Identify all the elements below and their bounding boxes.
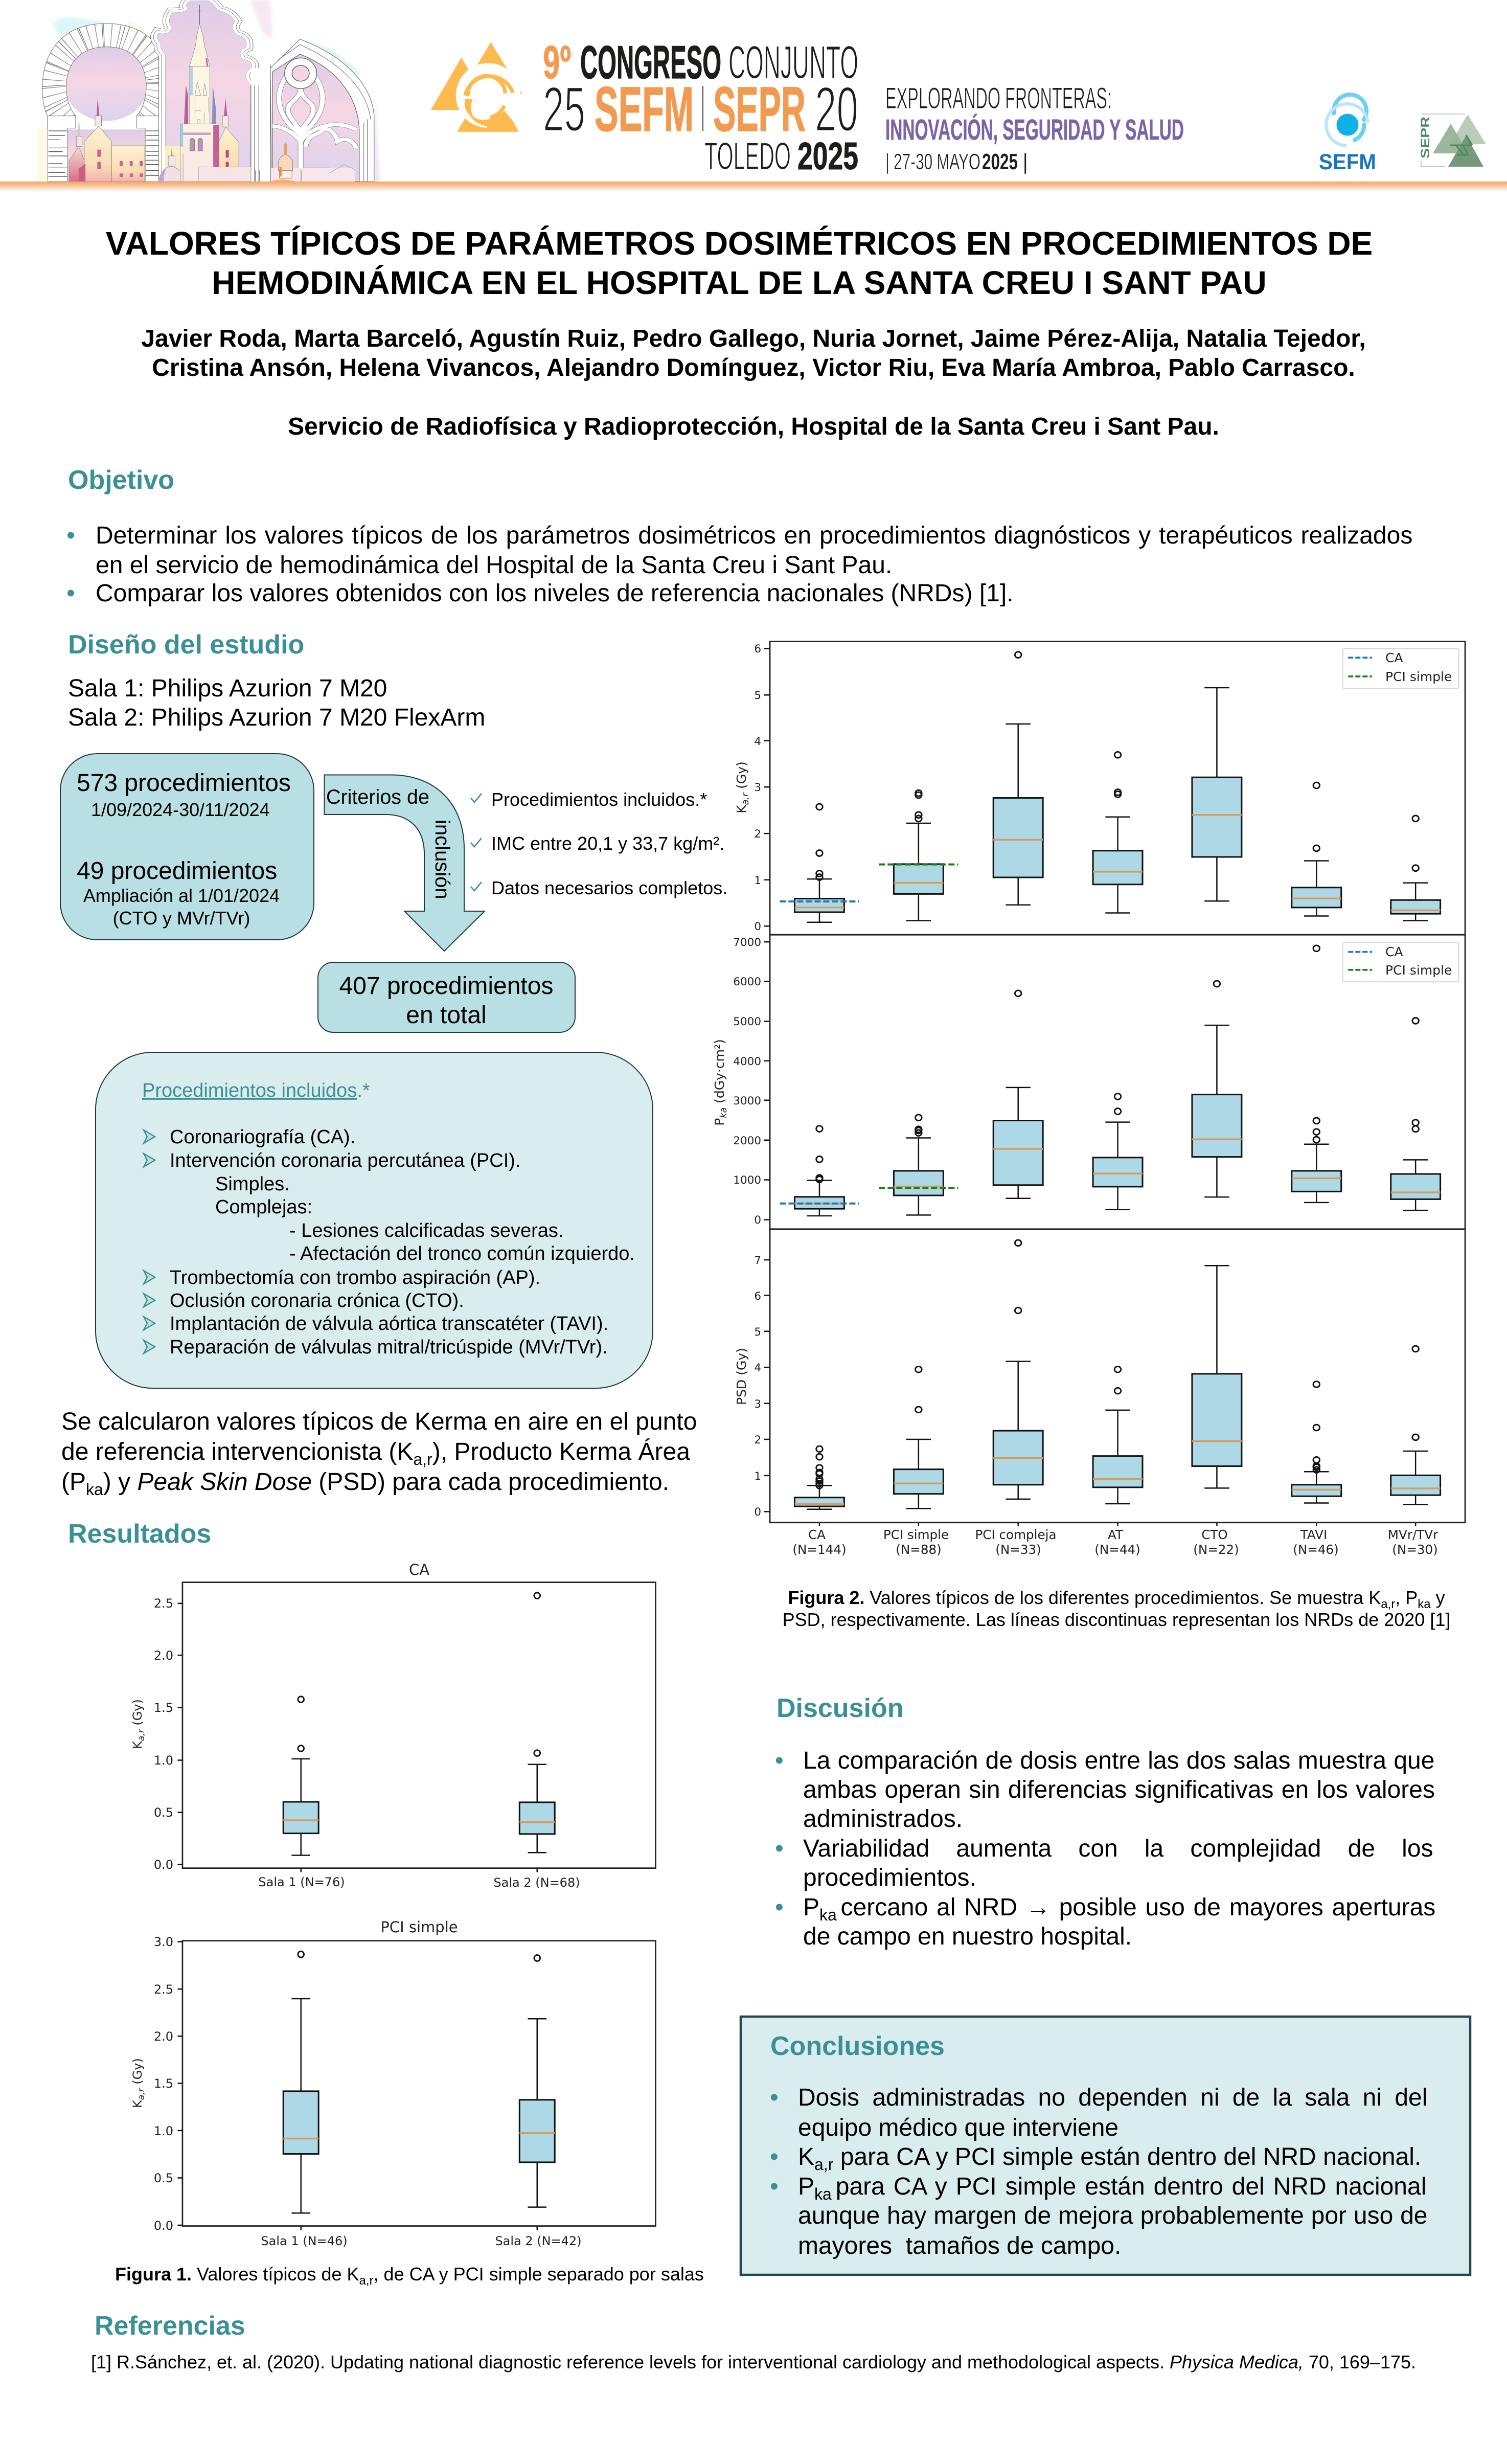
objectives list: • — [66, 580, 75, 607]
congress slogan: | 27-30 MAYO — [885, 149, 980, 174]
chart: PSD by procedure: PCI simple — [883, 1527, 949, 1542]
congress title wordmark: TOLEDO — [704, 134, 791, 177]
caption: figure 2: PSD, respectivamente. Las líneas discontinuas representan los NRDs de 2020 [1] — [783, 1609, 1450, 1630]
caption: figure 1: a,r — [359, 2274, 374, 2288]
chart: Pka by procedure: CA — [1385, 944, 1403, 959]
box: CA — [794, 804, 844, 922]
discussion list: P — [803, 1894, 819, 1921]
chart: Pka by procedure: 2000 — [733, 1135, 761, 1147]
methods paragraph: a,r — [413, 1450, 432, 1468]
heading: Diseño del estudio: Diseño del estudio — [68, 630, 304, 660]
chart: CA by room: 1.5 — [154, 1701, 173, 1715]
chart: Ka,r by procedure: 2 — [754, 828, 761, 841]
panel: included procedures: Reparación de válvulas mitral/tricúspide (MVr/TVr). — [170, 1337, 608, 1358]
authors: Javier Roda, Marta Barceló, Agustín Ruiz, Pedro Gallego, Nuria Jornet, Jaime Pérez-Alija, Natalia Tejedor, — [141, 325, 1366, 352]
congress title wordmark — [543, 37, 858, 177]
congress title wordmark: 25 — [543, 75, 585, 145]
chart: CA by room: 0.5 — [154, 1805, 173, 1820]
panel: initial procedures: 49 procedimientos — [77, 857, 277, 885]
caption: figure 2: Figura 2. Valores típicos de los diferentes procedimientos. Se muestra K — [788, 1587, 1381, 1608]
chart: Pka by procedure: 0 — [754, 1214, 761, 1227]
chart: PSD by procedure: TAVI — [1300, 1527, 1327, 1542]
header illustration: Toledo arches and skyline — [37, 0, 380, 182]
logo: SEFM — [1319, 95, 1376, 174]
authors: Cristina Ansón, Helena Vivancos, Alejandro Domínguez, Victor Riu, Eva María Ambroa, Pablo Carrasco. — [152, 354, 1355, 381]
congress slogan: 2025 — [982, 149, 1018, 174]
chart: PCI simple by room: 2.0 — [154, 2029, 173, 2044]
legend box — [1343, 648, 1458, 689]
conclusions list: K — [798, 2143, 814, 2171]
box: PCI simple — [894, 1115, 943, 1215]
congress slogan — [885, 82, 1184, 174]
chart: PSD by procedure: 6 — [754, 1290, 761, 1303]
rooms — [68, 675, 485, 731]
box: AT — [1093, 752, 1143, 913]
chart: PCI simple by room: a,r — [136, 2088, 147, 2100]
conclusions list: para CA y PCI simple están dentro del NRD nacional — [827, 2173, 1426, 2200]
chart: Ka,r by procedure: PCI simple — [1385, 669, 1452, 684]
chart: CA by room: 2.5 — [154, 1596, 173, 1611]
caption: figure 2: , P — [1395, 1587, 1418, 1608]
heading: Referencias: Referencias — [95, 2311, 245, 2341]
chart: Ka,r by procedure: 4 — [754, 735, 761, 748]
panel: initial procedures: 573 procedimientos — [77, 770, 291, 797]
chart: Pka by procedure: 3000 — [733, 1095, 761, 1107]
chart: Pka by procedure — [712, 935, 1465, 1229]
panel: initial procedures: Ampliación al 1/01/2024 — [83, 885, 280, 906]
inclusion criteria checklist: IMC entre 20,1 y 33,7 kg/m². — [491, 833, 724, 854]
chart: PSD by procedure: (N=46) — [1293, 1542, 1339, 1557]
caption: figure 2: y — [1431, 1587, 1445, 1608]
box: TAVI — [1292, 945, 1341, 1203]
box: MVr/TVr — [1391, 1346, 1441, 1505]
chart: PCI simple by room: (Gy) — [130, 2058, 145, 2088]
chart: PCI simple by room: 0.0 — [154, 2219, 173, 2233]
inclusion criteria checklist — [471, 789, 727, 898]
panel: included procedures: Implantación de válvula aórtica transcatéter (TAVI). — [170, 1313, 608, 1335]
congress title wordmark: SEPR — [713, 75, 806, 145]
panel: included procedures: Coronariografía (CA). — [170, 1126, 355, 1148]
affiliation: Servicio de Radiofísica y Radioprotección, Hospital de la Santa Creu i Sant Pau. — [288, 413, 1219, 440]
chart: CA by room: 1.0 — [154, 1753, 173, 1768]
box: Sala 1 — [283, 1697, 318, 1856]
chart: Ka,r by procedure: (Gy) — [734, 761, 749, 793]
congress title wordmark: 20 — [815, 75, 858, 145]
legend box — [1343, 942, 1458, 982]
logo: SEPR: SEPR — [1419, 117, 1432, 159]
discussion list: • — [775, 1747, 784, 1774]
chart: PSD by procedure: 1 — [754, 1470, 761, 1483]
chart: Ka,r by procedure: CA — [1385, 650, 1403, 665]
header band line — [0, 182, 1507, 192]
caption: figure 2 — [783, 1587, 1450, 1630]
authors — [141, 325, 1366, 381]
box: PCI simple — [894, 790, 943, 921]
chart: Ka,r by procedure — [734, 642, 1465, 935]
congress logo triangles — [431, 42, 522, 132]
chart: Pka by procedure: PCI simple — [1385, 963, 1452, 978]
chart: PSD by procedure: PSD (Gy) — [734, 1348, 749, 1405]
reference: [1] R.Sánchez, et. al. (2020). Updating national diagnostic reference levels for interventional cardiology and methodological aspects. Physica Medica, 70, 169–175. — [91, 2352, 1416, 2372]
discussion list: procedimientos. — [803, 1864, 976, 1891]
panel: included procedures: Trombectomía con trombo aspiración (AP). — [170, 1267, 540, 1288]
congress title wordmark: CONGRESO — [580, 37, 721, 88]
discussion list: de campo en nuestro hospital. — [803, 1923, 1132, 1950]
chart: PSD by procedure: 0 — [754, 1506, 761, 1519]
chart: CA by room: K — [130, 1741, 145, 1749]
box: PCI compleja — [993, 652, 1043, 905]
heading: Resultados: Resultados — [68, 1519, 211, 1549]
congress slogan: EXPLORANDO FRONTERAS: — [885, 82, 1112, 115]
chart: PCI simple by room: 2.5 — [154, 1982, 173, 1997]
rooms: Sala 2: Philips Azurion 7 M20 FlexArm — [68, 704, 485, 731]
discussion list: • — [775, 1894, 784, 1921]
chart: CA by room: 2.0 — [154, 1648, 173, 1663]
chart: PSD by procedure: CA — [808, 1527, 826, 1542]
chart: PCI simple by room: 1.0 — [154, 2124, 173, 2138]
chart: Ka,r by procedure: 0 — [754, 920, 761, 933]
box: CA — [794, 1446, 844, 1509]
title: VALORES TÍPICOS DE PARÁMETROS DOSIMÉTRICOS EN PROCEDIMIENTOS DE — [106, 225, 1373, 262]
chart: Pka by procedure: (dGy·cm²) — [712, 1039, 727, 1107]
caption: figure 1: , de CA y PCI simple separado por salas — [374, 2264, 704, 2285]
chart: Ka,r by procedure: K — [734, 805, 749, 813]
chart: Pka by procedure: 6000 — [733, 976, 761, 988]
inclusion criteria checklist: Procedimientos incluidos.* — [491, 789, 707, 810]
chart: PSD by procedure: (N=30) — [1392, 1542, 1438, 1557]
chart: PSD by procedure: AT — [1108, 1527, 1124, 1542]
chart: PCI simple by room: Sala 1 (N=46) — [261, 2234, 348, 2248]
panel: included procedures — [96, 1052, 653, 1388]
chart: PSD by procedure: MVr/TVr — [1388, 1527, 1438, 1542]
chart: CA by room: 0.0 — [154, 1858, 173, 1872]
panel: total procedures: 407 procedimientos — [339, 973, 553, 1000]
chart: Ka,r by procedure: a,r — [741, 792, 751, 805]
conclusions list: • — [770, 2143, 779, 2171]
title — [106, 225, 1373, 301]
box: PCI compleja — [993, 1240, 1043, 1499]
methods paragraph: de referencia intervencionista (K — [61, 1438, 413, 1465]
chart: PSD by procedure — [734, 1229, 1465, 1557]
reference lines: NRD — [780, 900, 859, 902]
arrow: inclusion criteria: Criterios de — [326, 786, 429, 808]
conclusions list: ka — [814, 2185, 832, 2203]
chart: PSD by procedure: 2 — [754, 1434, 761, 1446]
box: Sala 2 — [519, 1593, 555, 1852]
chart: PSD by procedure: (N=33) — [995, 1542, 1041, 1557]
chart: Pka by procedure: 7000 — [733, 936, 761, 949]
heading: Conclusiones: Conclusiones — [770, 2031, 945, 2061]
chart: PCI simple by room: Sala 2 (N=42) — [495, 2234, 582, 2248]
reference lines: NRD — [780, 1203, 859, 1205]
chart: Ka,r by procedure: 6 — [754, 643, 761, 655]
congress title wordmark: CONJUNTO — [728, 37, 858, 88]
caption: figure 1: Figura 1. Valores típicos de K — [115, 2264, 359, 2285]
box: PCI compleja — [993, 990, 1043, 1199]
conclusions list: • — [770, 2173, 779, 2200]
conclusions list: para CA y PCI simple están dentro del NRD nacional. — [833, 2143, 1421, 2171]
box: CTO — [1192, 981, 1242, 1197]
box: MVr/TVr — [1391, 816, 1441, 921]
box: Sala 2 — [519, 1955, 555, 2207]
chart: CA by room: Sala 2 (N=68) — [493, 1875, 580, 1890]
box: TAVI — [1292, 1381, 1341, 1503]
chart: CA by room: CA — [409, 1561, 429, 1578]
conclusions list: aunque hay margen de mejora probablemente por uso de — [798, 2202, 1427, 2229]
chart: PCI simple by room: K — [130, 2100, 145, 2108]
discussion list: La comparación de dosis entre las dos salas muestra que — [803, 1747, 1434, 1774]
chart: PCI simple by room — [130, 1918, 655, 2248]
methods paragraph: Peak Skin Dose (PSD) para cada procedimiento. — [137, 1468, 669, 1496]
chart: Pka by procedure: ka — [719, 1107, 729, 1118]
panel: included procedures: Simples. — [215, 1173, 290, 1195]
conclusions list: Dosis administradas no dependen ni de la sala ni del — [798, 2084, 1427, 2111]
heading: Discusión: Discusión — [777, 1693, 904, 1723]
arrow: inclusion criteria — [324, 775, 485, 951]
box: CTO — [1192, 688, 1242, 901]
congress title wordmark: SEFM — [595, 75, 694, 145]
chart: PSD by procedure: PCI compleja — [975, 1527, 1057, 1542]
panel: total procedures — [318, 962, 575, 1032]
methods paragraph: (P — [61, 1468, 86, 1496]
logo: SEPR — [1419, 114, 1486, 167]
discussion list: ka — [819, 1906, 837, 1924]
chart: CA by room: (Gy) — [130, 1699, 145, 1729]
congress slogan: | — [1022, 149, 1028, 174]
chart: Pka by procedure: 5000 — [733, 1015, 761, 1028]
box: CTO — [1192, 1265, 1242, 1488]
chart: Pka by procedure: 1000 — [733, 1174, 761, 1187]
discussion list: cercano al NRD → posible uso de mayores aperturas — [832, 1894, 1435, 1921]
chart: CA by room — [130, 1561, 655, 1890]
box: TAVI — [1292, 782, 1341, 916]
inclusion criteria checklist: Datos necesarios completos. — [491, 877, 727, 898]
panel: initial procedures: 1/09/2024-30/11/2024 — [91, 799, 270, 820]
conclusions list: P — [798, 2173, 814, 2200]
discussion list: Variabilidad aumenta con la complejidad de los — [803, 1835, 1433, 1862]
objectives list: Comparar los valores obtenidos con los niveles de referencia nacionales (NRDs) [1]. — [96, 580, 1014, 607]
chart: PSD by procedure: (N=22) — [1193, 1542, 1239, 1557]
methods paragraph: ) y — [103, 1468, 137, 1496]
conclusions list: • — [770, 2084, 779, 2111]
congress title wordmark: 2025 — [797, 134, 858, 177]
chart: Ka,r by procedure: 1 — [754, 874, 761, 887]
rooms: Sala 1: Philips Azurion 7 M20 — [68, 675, 387, 702]
chart: Pka by procedure: P — [712, 1118, 727, 1126]
panel: included procedures: Procedimientos incluidos.* — [142, 1080, 370, 1101]
chart: PCI simple by room: 1.5 — [154, 2076, 173, 2091]
panel: included procedures: - Afectación del tronco común izquierdo. — [289, 1243, 635, 1264]
panel: included procedures: Intervención coronaria percutánea (PCI). — [170, 1150, 520, 1171]
objectives list: Determinar los valores típicos de los parámetros dosimétricos en procedimientos diagnósticos y terapéuticos realizados — [96, 522, 1412, 549]
conclusions list: mayores tamaños de campo. — [798, 2232, 1121, 2259]
panel: included procedures: Complejas: — [215, 1196, 312, 1218]
methods paragraph: ka — [86, 1480, 103, 1499]
chart: PSD by procedure: 7 — [754, 1254, 761, 1267]
chart: PCI simple by room: 0.5 — [154, 2171, 173, 2185]
chart: Pka by procedure: 4000 — [733, 1055, 761, 1068]
panel: included procedures: Oclusión coronaria crónica (CTO). — [170, 1290, 464, 1312]
caption: figure 2: a,r — [1381, 1597, 1395, 1611]
chart: PSD by procedure: (N=144) — [792, 1542, 847, 1557]
logo: SEFM: SEFM — [1319, 150, 1376, 174]
chart: CA by room: Sala 1 (N=76) — [258, 1875, 345, 1889]
chart: PSD by procedure: (N=44) — [1094, 1542, 1140, 1557]
discussion list: ambas operan sin diferencias significativas en los valores — [803, 1776, 1435, 1803]
methods paragraph: ), Producto Kerma Área — [432, 1438, 690, 1465]
panel: total procedures: en total — [406, 1002, 487, 1029]
panel: included procedures: - Lesiones calcificadas severas. — [289, 1220, 563, 1241]
conclusions list: equipo médico que interviene — [798, 2114, 1118, 2141]
box: AT — [1093, 1094, 1143, 1210]
chart: PSD by procedure: 5 — [754, 1326, 761, 1339]
objectives list — [66, 522, 1412, 607]
congress slogan: INNOVACIÓN, SEGURIDAD Y SALUD — [885, 114, 1184, 146]
objectives list: • — [66, 522, 75, 549]
chart: PSD by procedure: (N=88) — [896, 1542, 942, 1557]
caption: figure 2: ka — [1418, 1597, 1431, 1611]
congress title wordmark: 9º — [543, 37, 571, 88]
panel: conclusions — [741, 2017, 1470, 2275]
title: HEMODINÁMICA EN EL HOSPITAL DE LA SANTA CREU I SANT PAU — [212, 264, 1267, 301]
panel: initial procedures — [60, 754, 314, 940]
methods paragraph: Se calcularon valores típicos de Kerma en aire en el punto — [61, 1408, 697, 1435]
chart: Ka,r by procedure: 5 — [754, 689, 761, 702]
discussion list: • — [775, 1835, 784, 1862]
box: CA — [794, 1126, 844, 1216]
box: PCI simple — [894, 1366, 943, 1508]
chart: PSD by procedure: 4 — [754, 1362, 761, 1374]
chart: PSD by procedure: 3 — [754, 1398, 761, 1411]
chart: CA by room: a,r — [136, 1729, 147, 1741]
box: Sala 1 — [283, 1951, 318, 2213]
chart: Ka,r by procedure: 3 — [754, 781, 761, 794]
methods paragraph — [61, 1408, 697, 1499]
chart: PCI simple by room: 3.0 — [154, 1935, 173, 1949]
conclusions list — [770, 2084, 1427, 2259]
chart: PCI simple by room: PCI simple — [380, 1918, 458, 1936]
discussion list: administrados. — [803, 1805, 963, 1833]
conclusions list: a,r — [814, 2155, 834, 2174]
heading: Objetivo: Objetivo — [68, 465, 174, 495]
discussion list — [775, 1747, 1435, 1950]
objectives list: en el servicio de hemodinámica del Hospital de la Santa Creu i Sant Pau. — [96, 552, 892, 579]
panel: initial procedures: (CTO y MVr/TVr) — [113, 908, 250, 929]
box: AT — [1093, 1366, 1143, 1504]
arrow: inclusion criteria: inclusión — [431, 820, 453, 899]
box: MVr/TVr — [1391, 1018, 1441, 1210]
chart: PSD by procedure: CTO — [1201, 1527, 1228, 1542]
